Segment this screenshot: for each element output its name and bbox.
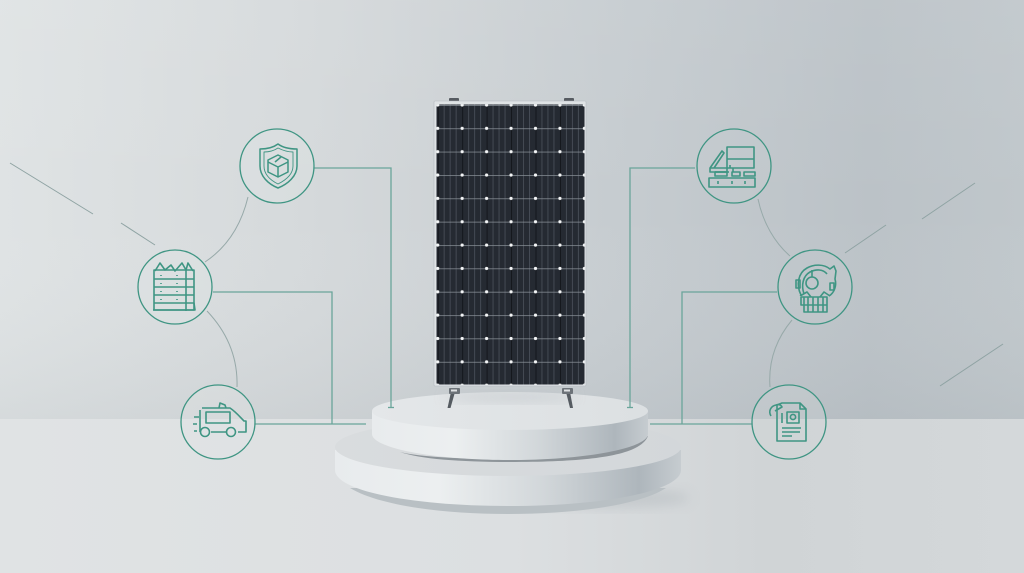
panel clips <box>449 98 574 102</box>
panel frame <box>434 101 586 386</box>
icon: document with clip <box>752 385 826 459</box>
upper disc <box>372 392 648 460</box>
icon: shield with cube <box>240 129 314 203</box>
solar panel <box>434 98 586 408</box>
icon: gear with circuit <box>778 250 852 324</box>
background wall <box>0 0 1024 420</box>
icon: machine workstation <box>697 129 771 203</box>
curved connectors between icons <box>205 197 792 387</box>
podium <box>335 392 690 514</box>
podium shadow <box>530 488 690 508</box>
lower disc <box>335 418 681 514</box>
icon: delivery van <box>181 385 255 459</box>
icon: factory building <box>138 250 212 324</box>
connector lines <box>213 168 777 424</box>
floor <box>0 419 1024 573</box>
panel stand legs <box>448 388 573 408</box>
decorative diagonal lines <box>10 163 1003 386</box>
upper disc shadow <box>400 436 648 462</box>
panel cells <box>436 104 584 384</box>
